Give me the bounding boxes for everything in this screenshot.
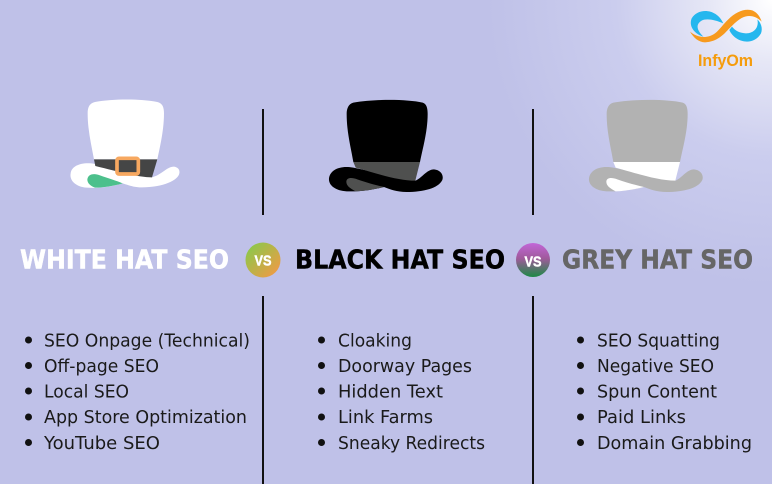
- divider: [532, 296, 534, 484]
- logo wordmark: InfyOm: [698, 51, 753, 70]
- icon: grey hat: [589, 100, 703, 192]
- list: white hat techniques: SEO Onpage (Technical): [44, 330, 250, 352]
- list: grey hat techniques: Paid Links: [597, 407, 686, 428]
- list: white hat techniques: YouTube SEO: [43, 433, 160, 454]
- list: grey hat techniques: Spun Content: [597, 382, 717, 402]
- badge: vs 2: [516, 243, 550, 277]
- heading: white hat seo: WHITE HAT SEO: [20, 246, 229, 276]
- list: grey hat techniques: [577, 330, 752, 454]
- icon: infinity symbol: [690, 10, 762, 42]
- badge: vs 1: [246, 242, 280, 278]
- list: black hat techniques: Cloaking: [338, 330, 412, 352]
- logo: InfyOm: [690, 10, 762, 70]
- list: grey hat techniques: Negative SEO: [597, 356, 714, 377]
- list: black hat techniques: Doorway Pages: [338, 356, 472, 377]
- list: black hat techniques: Link Farms: [338, 407, 433, 428]
- list: white hat techniques: [25, 330, 250, 454]
- divider: [532, 109, 534, 215]
- divider: [262, 109, 264, 215]
- list: white hat techniques: Off-page SEO: [44, 356, 159, 377]
- heading: black hat seo: BLACK HAT SEO: [295, 246, 505, 276]
- list: white hat techniques: App Store Optimization: [44, 407, 247, 428]
- list: black hat techniques: Hidden Text: [338, 382, 443, 402]
- list: grey hat techniques: Domain Grabbing: [597, 433, 752, 454]
- icon: white hat: [70, 99, 179, 188]
- icon: black hat: [329, 100, 443, 192]
- badge: vs 1: VS: [254, 254, 272, 270]
- list: grey hat techniques: SEO Squatting: [597, 330, 720, 352]
- list: black hat techniques: Sneaky Redirects: [338, 433, 485, 454]
- divider: [262, 296, 264, 484]
- list: white hat techniques: Local SEO: [44, 382, 129, 402]
- heading: grey hat seo: GREY HAT SEO: [562, 246, 753, 276]
- list: black hat techniques: [318, 330, 485, 454]
- badge: vs 2: VS: [524, 254, 542, 270]
